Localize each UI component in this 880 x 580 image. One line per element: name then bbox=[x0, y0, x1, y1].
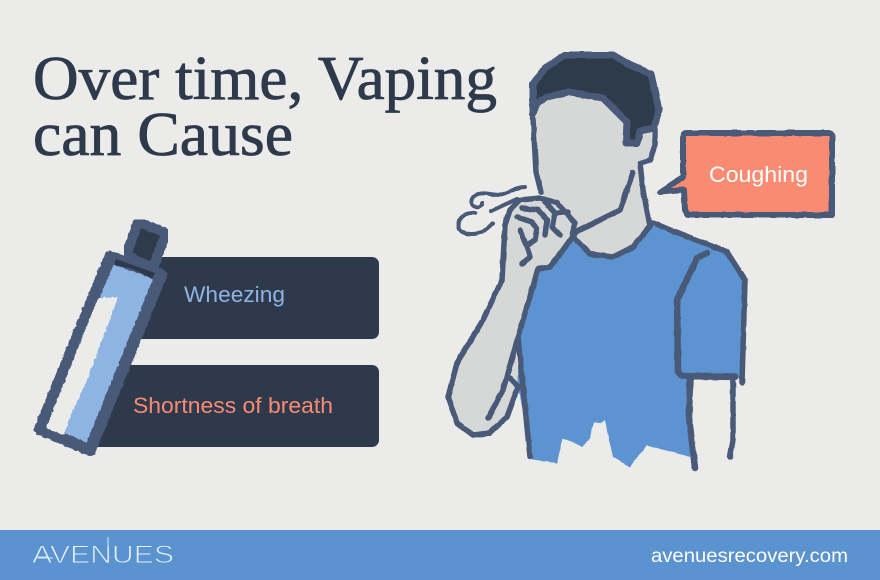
title bbox=[33, 45, 497, 169]
icon: vape pen bbox=[40, 222, 166, 450]
panel: wheezing: Wheezing bbox=[184, 282, 285, 307]
title: Over time, Vaping bbox=[33, 45, 497, 113]
smoke puffs bbox=[471, 187, 525, 207]
skin: arm and hand bbox=[448, 198, 575, 435]
logo: avenues: AVENUES bbox=[32, 541, 174, 569]
website url: avenuesrecovery.com bbox=[651, 546, 848, 567]
hair bbox=[533, 55, 659, 143]
illustration: person coughing bbox=[448, 55, 745, 468]
callout: coughing: Coughing bbox=[709, 162, 808, 187]
outlines bbox=[448, 118, 745, 468]
skin: face and neck bbox=[533, 92, 655, 257]
footer band bbox=[0, 530, 880, 580]
title: can Cause bbox=[33, 101, 293, 169]
panel: wheezing bbox=[130, 257, 379, 339]
shirt bbox=[516, 224, 745, 467]
panel: shortness of breath: Shortness of breath bbox=[133, 393, 333, 418]
panel: shortness of breath bbox=[85, 365, 379, 447]
callout: coughing bbox=[660, 133, 832, 215]
